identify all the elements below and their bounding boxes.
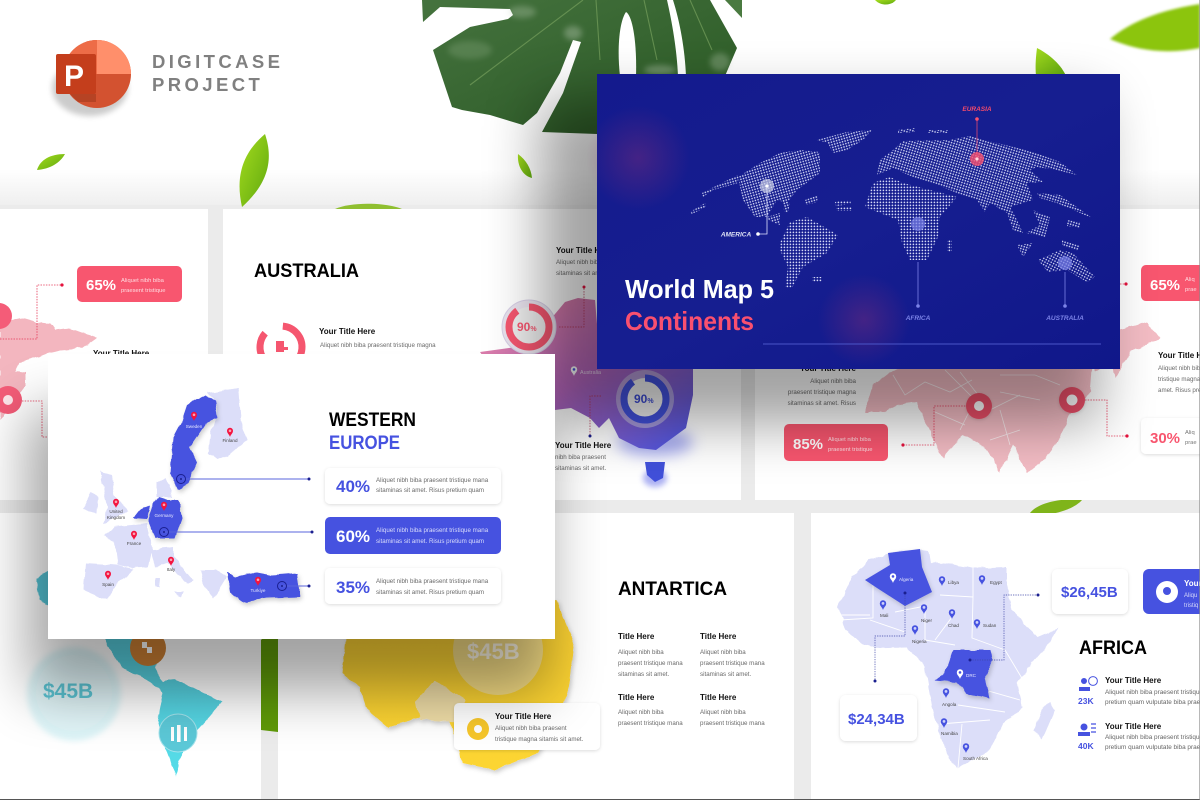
country labels: Spain <box>102 582 114 587</box>
heading: AFRICA <box>1079 637 1147 659</box>
text block bottom <box>555 441 612 472</box>
Antarctica map <box>342 600 574 770</box>
country labels: Libya <box>948 580 959 585</box>
Algeria highlight <box>865 549 932 606</box>
country labels: Niger <box>921 618 932 623</box>
$26,45B card: $26,45B <box>1061 584 1118 601</box>
text column one: Title Here <box>618 693 655 702</box>
Australia marker <box>1045 256 1084 322</box>
30% card: Aliq <box>1185 430 1195 436</box>
country labels: Namibia <box>941 731 958 736</box>
blue card: Aliqu <box>1184 593 1197 599</box>
stat 40K: Your Title Here <box>1105 722 1162 731</box>
text block <box>788 364 857 407</box>
card 60%: sitaminas sit amet. Risus pretium quam <box>376 538 484 545</box>
text column one: Aliquet nibh biba <box>618 649 664 656</box>
text block top right: sitaminas sit amet. <box>556 270 608 277</box>
stat 23K: 23K <box>1078 696 1094 706</box>
text block top right: Aliquet nibh biba <box>556 259 602 266</box>
country labels: Angola <box>942 702 957 707</box>
country labels: Sudan <box>983 623 997 628</box>
right text block: tristique magna <box>1158 376 1200 383</box>
DRC highlight <box>934 650 993 698</box>
stat 23K <box>1078 676 1200 706</box>
stat 40K <box>1078 722 1200 751</box>
heading: EUROPE <box>329 432 400 454</box>
30% card <box>1141 418 1200 454</box>
country labels <box>102 424 266 593</box>
text column one <box>618 632 683 727</box>
text block bottom: nibh biba praesent <box>555 454 606 461</box>
Africa marker <box>905 217 931 322</box>
North America dots <box>690 130 872 225</box>
85% card: Aliquet nibh biba <box>828 437 872 443</box>
country labels: Finland <box>222 438 238 443</box>
65% card: Aliq <box>1185 277 1195 283</box>
right text block <box>1158 351 1200 394</box>
donut with icon <box>258 324 304 370</box>
text block top right: Your Title Here <box>556 246 613 255</box>
connector dots <box>874 592 1040 682</box>
Africa map <box>838 549 1058 768</box>
65% card: Aliquet nibh biba <box>121 278 165 284</box>
text block <box>319 327 436 349</box>
country labels: Kingdom <box>107 515 125 520</box>
panel: Western Europe <box>48 354 555 639</box>
text block: Your Title Here <box>800 364 857 373</box>
callout: Aliquet nibh biba praesent <box>495 725 567 732</box>
country labels: Mali <box>880 613 888 618</box>
card 60% <box>325 517 501 554</box>
text column two <box>700 632 765 727</box>
text column two: praesent tristique mana <box>700 720 765 727</box>
connector dots <box>163 478 314 588</box>
$45B bubble: $45B <box>467 639 520 664</box>
heading: AUSTRALIA <box>254 260 359 282</box>
65% card: 65% <box>86 277 116 294</box>
30% card: 30% <box>1150 430 1180 447</box>
$24,34B card <box>840 695 917 741</box>
panel: World Map hero <box>586 74 1120 369</box>
text column one: praesent tristique mana <box>618 660 683 667</box>
65% card: 65% <box>1150 277 1180 294</box>
$24,34B card: $24,34B <box>848 711 905 728</box>
clipped title: Your Title Here <box>93 349 150 358</box>
slide: Asia left fragment <box>0 209 208 500</box>
dotted world map <box>690 128 1095 288</box>
donut 90% blue: 90% <box>634 392 654 406</box>
text block top right <box>556 246 613 277</box>
title <box>625 274 774 336</box>
slide: Africa <box>811 513 1200 800</box>
card 40%: sitaminas sit amet. Risus pretium quam <box>376 487 484 494</box>
text column two: sitaminas sit amet. <box>700 671 752 678</box>
America marker <box>720 179 774 238</box>
donut 90% pink: 90% <box>517 320 537 334</box>
Africa marker: AFRICA <box>905 315 931 322</box>
text block: Aliquet nibh biba <box>810 378 857 385</box>
label Australia: Australia <box>580 370 601 376</box>
connector lines <box>160 474 312 590</box>
callout <box>454 703 600 750</box>
text column two: Aliquet nibh biba <box>700 709 746 716</box>
country labels: Sweden <box>186 424 203 429</box>
country labels: Egypt <box>990 580 1002 585</box>
heading: ANTARTICA <box>618 578 727 600</box>
country labels: Italy <box>167 567 176 572</box>
65% card <box>77 266 182 302</box>
text column one: Aliquet nibh biba <box>618 709 664 716</box>
blue card: tristiq <box>1184 603 1198 609</box>
country labels <box>880 577 1002 761</box>
slide: Australia <box>223 209 741 500</box>
teal circle <box>159 714 197 752</box>
slide: Americas <box>0 513 261 800</box>
country labels: Chad <box>948 623 959 628</box>
donut 90% blue <box>616 370 674 428</box>
Americas map <box>36 570 222 777</box>
65% card <box>1141 265 1200 301</box>
65% card: prae <box>1185 287 1197 293</box>
brand name: DIGITCASE <box>152 51 283 72</box>
$45B bubble <box>27 647 121 741</box>
title: Continents <box>625 306 754 336</box>
$45B bubble <box>453 605 543 695</box>
country labels: United <box>109 509 123 514</box>
card 60%: Aliquet nibh biba praesent tristique mana <box>376 527 489 534</box>
stat 40K: 40K <box>1078 741 1094 751</box>
Asia map <box>865 322 1160 472</box>
monstera leaf <box>422 0 742 134</box>
text block: sitaminas sit amet. Risus <box>788 400 856 407</box>
$26,45B card <box>1052 569 1128 614</box>
Australia marker: AUSTRALIA <box>1045 315 1084 322</box>
Europe map: highlighted countries <box>133 395 300 602</box>
65% card: praesent tristique <box>121 288 165 294</box>
label Australia <box>571 366 601 376</box>
Eurasia dots <box>877 128 1092 257</box>
text block bottom: Your Title Here <box>555 441 612 450</box>
map marker circles <box>0 303 22 414</box>
card 60%: 60% <box>336 527 370 546</box>
logo: PowerPoint icon <box>52 40 131 116</box>
pink map fragment <box>0 318 97 420</box>
heading <box>329 409 416 454</box>
text block: Aliquet nibh biba praesent tristique magna <box>320 342 436 349</box>
Australia map <box>480 298 693 487</box>
Eurasia marker <box>962 106 992 166</box>
callout: Your Title Here <box>495 712 552 721</box>
slide: Antartica <box>278 513 794 800</box>
heading: WESTERN <box>329 409 416 431</box>
Australia dots <box>1038 250 1095 282</box>
brand name: PROJECT <box>152 74 263 95</box>
card 40%: Aliquet nibh biba praesent tristique mana <box>376 477 489 484</box>
country labels: Nigeria <box>912 639 927 644</box>
text column two: praesent tristique mana <box>700 660 765 667</box>
Europe map: light countries <box>82 388 247 600</box>
text column two: Title Here <box>700 632 737 641</box>
country labels: South Africa <box>963 756 988 761</box>
text block: praesent tristique magna <box>788 389 857 396</box>
text column two: Aliquet nibh biba <box>700 649 746 656</box>
text block bottom: sitaminas sit amet. <box>555 465 607 472</box>
card 35%: 35% <box>336 578 370 597</box>
card 35% <box>325 568 501 604</box>
connector dots <box>901 282 1129 447</box>
country labels: DRC <box>966 673 977 678</box>
text column one: sitaminas sit amet. <box>618 671 670 678</box>
country labels: Germany <box>155 513 174 518</box>
text block: Your Title Here <box>319 327 376 336</box>
map pins <box>105 412 261 586</box>
logo: PowerPoint icon: P <box>64 60 84 93</box>
85% card <box>784 424 888 461</box>
85% card: praesent tristique <box>828 447 872 453</box>
South America and Africa dots <box>780 177 957 288</box>
85% card: 85% <box>793 436 823 453</box>
brand name <box>152 51 283 95</box>
blue card <box>1143 569 1200 614</box>
30% card: prae <box>1185 440 1197 446</box>
$45B bubble: $45B <box>43 680 93 703</box>
title: World Map 5 <box>625 274 774 304</box>
card 35%: Aliquet nibh biba praesent tristique mana <box>376 578 489 585</box>
stat 23K: Your Title Here <box>1105 676 1162 685</box>
country labels: Algeria <box>899 577 914 582</box>
callout: tristique magna sitamis sit amet. <box>495 736 584 743</box>
purple glows <box>586 106 910 366</box>
donut 90% pink <box>502 300 556 354</box>
dotted connectors <box>875 593 1038 681</box>
slide: Asia <box>755 209 1200 500</box>
text column one: praesent tristique mana <box>618 720 683 727</box>
card 35%: sitaminas sit amet. Risus pretium quam <box>376 589 484 596</box>
text column two: Title Here <box>700 693 737 702</box>
card 40% <box>325 468 501 504</box>
text column one: Title Here <box>618 632 655 641</box>
country labels: France <box>127 541 142 546</box>
dotted connectors <box>903 284 1127 445</box>
Eurasia marker: EURASIA <box>962 106 992 113</box>
map pins <box>880 573 985 753</box>
orange circle <box>130 630 166 666</box>
map circle icons <box>966 387 1085 419</box>
country labels: Turkiye <box>251 588 266 593</box>
card 40%: 40% <box>336 477 370 496</box>
America marker: AMERICA <box>720 232 751 238</box>
